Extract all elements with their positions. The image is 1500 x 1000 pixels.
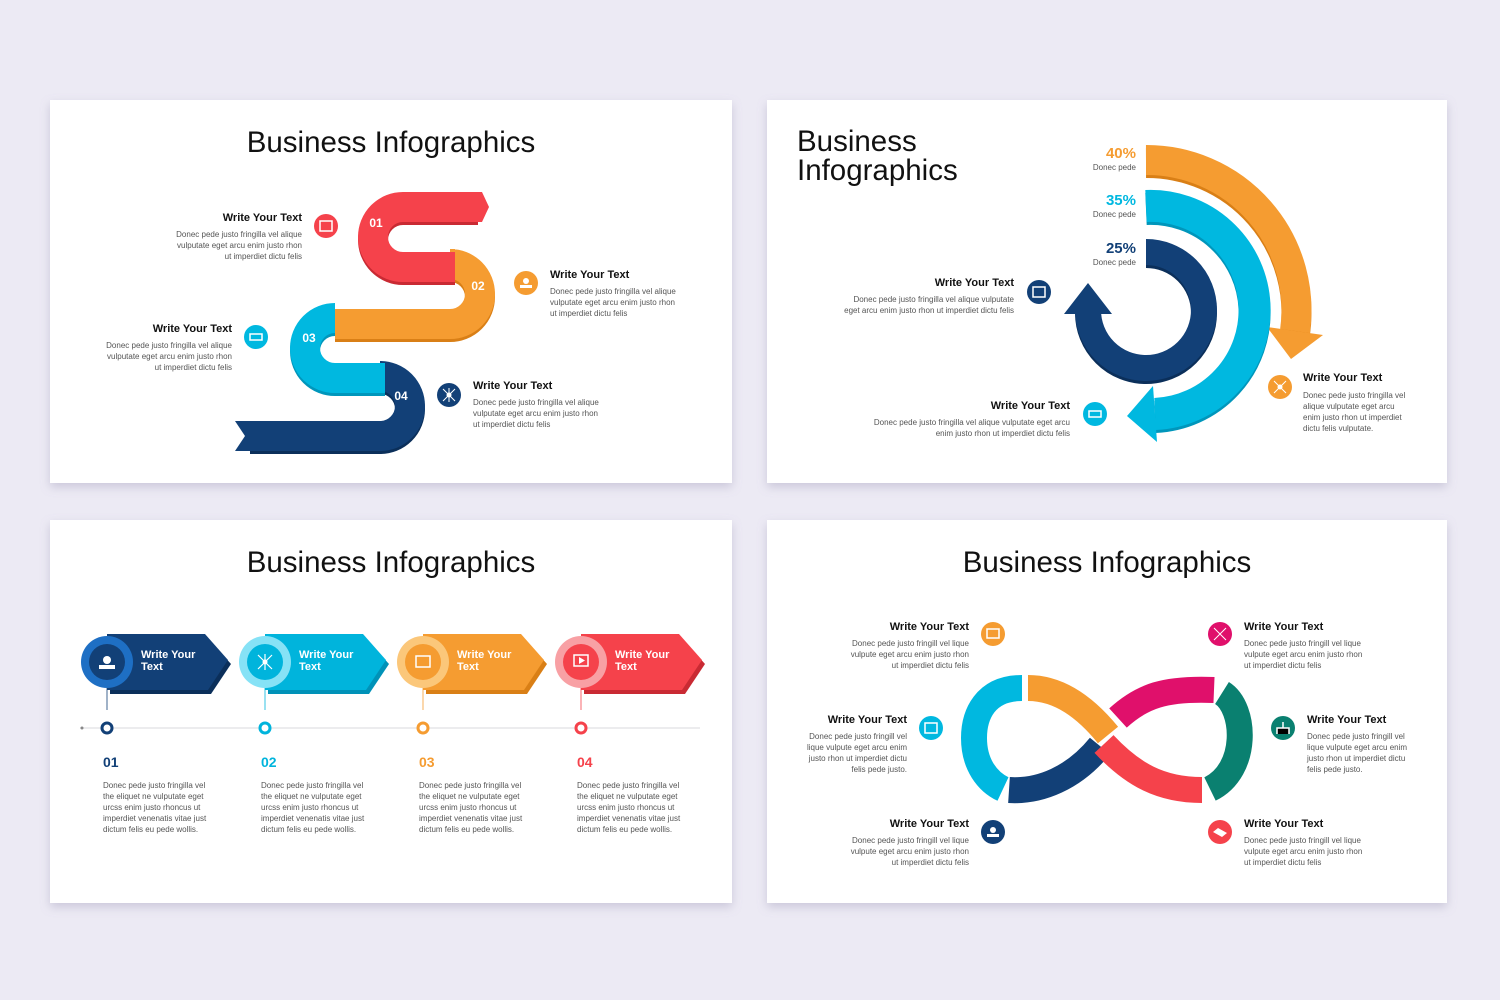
step 03: imperdiet venenatis vitae just <box>419 814 523 823</box>
text blocks <box>106 212 676 429</box>
step 02: 02 <box>261 754 277 770</box>
step 04: imperdiet venenatis vitae just <box>577 814 681 823</box>
step 03: Donec pede justo fringilla vel <box>419 781 522 790</box>
chart: infinity <box>974 688 1240 790</box>
text blocks: vulputate eget arcu enim justo rhon <box>107 352 232 361</box>
text blocks: vulpute eget arcu enim justo rhon <box>1244 847 1362 856</box>
text blocks: Write Your Text <box>890 818 969 830</box>
step 02: Write Your <box>299 649 354 661</box>
step 02 <box>239 634 389 834</box>
step 03: dictum felis eu pede wollis. <box>419 825 514 834</box>
chart: S-path arrow <box>235 192 489 451</box>
percent labels: Donec pede <box>1093 163 1137 172</box>
text blocks: enim justo rhon ut imperdiet <box>1303 413 1402 422</box>
text blocks: ut imperdiet dictu felis <box>1244 858 1321 867</box>
text blocks: Write Your Text <box>1307 714 1387 726</box>
step 02: Text <box>299 661 321 673</box>
text blocks: felis pede justo. <box>851 765 907 774</box>
step 03: Text <box>457 661 479 673</box>
step 01 <box>81 634 231 834</box>
panel: S-shaped steps <box>50 100 732 483</box>
step 03: the eliquet ne vulputate eget <box>419 792 520 801</box>
text blocks: Donec pede justo fringill vel lique <box>852 639 970 648</box>
step 02: Donec pede justo fringilla vel <box>261 781 364 790</box>
text blocks: vulputate eget arcu enim justo rhon <box>473 409 598 418</box>
panel: infinity loop <box>767 520 1447 903</box>
step 03: 03 <box>419 754 435 770</box>
text blocks: ut imperdiet dictu felis <box>155 363 232 372</box>
text blocks: ut imperdiet dictu felis <box>892 858 969 867</box>
step 04: the eliquet ne vulputate eget <box>577 792 678 801</box>
step 01: the eliquet ne vulputate eget <box>103 792 204 801</box>
text blocks: Donec pede justo fringill vel <box>1307 732 1405 741</box>
percent labels <box>1093 145 1137 267</box>
text blocks: Write Your Text <box>890 621 969 633</box>
text blocks: Write Your Text <box>991 400 1070 412</box>
text blocks: ut imperdiet dictu felis <box>550 309 627 318</box>
step 04: urcss enim justo rhoncus ut <box>577 803 675 812</box>
chart: S-path arrow: 04 <box>394 389 408 403</box>
text blocks: Donec pede justo fringilla vel alique <box>106 341 233 350</box>
text blocks: Donec pede justo fringilla vel <box>1303 391 1406 400</box>
text blocks <box>844 277 1406 438</box>
step 02: dictum felis eu pede wollis. <box>261 825 356 834</box>
text blocks: Donec pede justo fringilla vel alique <box>176 230 303 239</box>
step 01: imperdiet venenatis vitae just <box>103 814 207 823</box>
text blocks <box>807 621 1407 867</box>
text blocks: vulpute eget arcu enim justo rhon <box>851 847 969 856</box>
icons <box>244 214 538 407</box>
percent labels: 35% <box>1106 192 1136 209</box>
text blocks: enim justo rhon ut imperdiet dictu felis <box>936 429 1070 438</box>
text blocks: Write Your Text <box>1244 818 1324 830</box>
step 04 <box>555 634 705 834</box>
step 01: Donec pede justo fringilla vel <box>103 781 206 790</box>
text blocks: ut imperdiet dictu felis <box>1244 661 1321 670</box>
step 04: Write Your <box>615 649 670 661</box>
step 04: Text <box>615 661 637 673</box>
title: Business <box>797 125 917 158</box>
text blocks: Write Your Text <box>223 212 302 224</box>
text blocks: justo rhon ut imperdiet dictu <box>1306 754 1405 763</box>
text blocks: eget arcu enim justo rhon ut imperdiet dictu felis <box>844 306 1014 315</box>
title: Infographics <box>797 154 958 187</box>
text blocks: Donec pede justo fringill vel <box>809 732 907 741</box>
text blocks: dictu felis vulputate. <box>1303 424 1373 433</box>
text blocks: vulputate eget arcu enim justo rhon <box>177 241 302 250</box>
step 03: Write Your <box>457 649 512 661</box>
text blocks: Donec pede justo fringill vel lique <box>1244 836 1362 845</box>
chart: S-path arrow: 01 <box>369 216 383 230</box>
text blocks: Write Your Text <box>1303 372 1383 384</box>
icons <box>1027 280 1292 426</box>
panel: timeline <box>50 520 732 903</box>
text blocks: Donec pede justo fringilla vel alique vulputate eget arcu <box>874 418 1070 427</box>
step 01: urcss enim justo rhoncus ut <box>103 803 201 812</box>
text blocks: ut imperdiet dictu felis <box>473 420 550 429</box>
text blocks: lique vulpute eget arcu enim <box>807 743 907 752</box>
text blocks: Write Your Text <box>550 269 630 281</box>
text blocks: felis pede justo. <box>1307 765 1363 774</box>
title: Business Infographics <box>247 546 535 579</box>
step 04: dictum felis eu pede wollis. <box>577 825 672 834</box>
chart: S-path arrow: 02 <box>471 279 485 293</box>
title: Business Infographics <box>963 546 1251 579</box>
text blocks: justo rhon ut imperdiet dictu <box>808 754 907 763</box>
text blocks: ut imperdiet dictu felis <box>892 661 969 670</box>
text blocks: vulpute eget arcu enim justo rhon <box>1244 650 1362 659</box>
step 02: the eliquet ne vulputate eget <box>261 792 362 801</box>
text blocks: Donec pede justo fringilla vel alique vulputate <box>853 295 1015 304</box>
panel: circular arrows <box>767 100 1447 483</box>
text blocks: lique vulpute eget arcu enim <box>1307 743 1407 752</box>
percent labels: 25% <box>1106 240 1136 257</box>
text blocks: Write Your Text <box>473 380 553 392</box>
text blocks: alique vulputate eget arcu <box>1303 402 1395 411</box>
text blocks: vulpute eget arcu enim justo rhon <box>851 650 969 659</box>
chart: S-path arrow: 03 <box>302 331 316 345</box>
percent labels: Donec pede <box>1093 210 1137 219</box>
step 02: urcss enim justo rhoncus ut <box>261 803 359 812</box>
text blocks: Donec pede justo fringilla vel alique <box>550 287 676 296</box>
step 04: Donec pede justo fringilla vel <box>577 781 680 790</box>
chart: concentric arrows <box>1064 160 1323 442</box>
text blocks: Write Your Text <box>828 714 907 726</box>
step 01: 01 <box>103 754 119 770</box>
percent labels: 40% <box>1106 145 1136 162</box>
step 01: Write Your <box>141 649 196 661</box>
step 03: urcss enim justo rhoncus ut <box>419 803 517 812</box>
percent labels: Donec pede <box>1093 258 1137 267</box>
text blocks: Write Your Text <box>935 277 1014 289</box>
text blocks: Donec pede justo fringilla vel alique <box>473 398 599 407</box>
text blocks: ut imperdiet dictu felis <box>225 252 302 261</box>
title: Business Infographics <box>247 126 535 159</box>
text blocks: Donec pede justo fringill vel lique <box>852 836 970 845</box>
step 01: dictum felis eu pede wollis. <box>103 825 198 834</box>
step 02: imperdiet venenatis vitae just <box>261 814 365 823</box>
text blocks: Write Your Text <box>153 323 232 335</box>
text blocks: Write Your Text <box>1244 621 1324 633</box>
step 01: Text <box>141 661 163 673</box>
step 04: 04 <box>577 754 593 770</box>
step 03 <box>397 634 547 834</box>
icons <box>919 622 1295 844</box>
text blocks: Donec pede justo fringill vel lique <box>1244 639 1362 648</box>
text blocks: vulputate eget arcu enim justo rhon <box>550 298 675 307</box>
